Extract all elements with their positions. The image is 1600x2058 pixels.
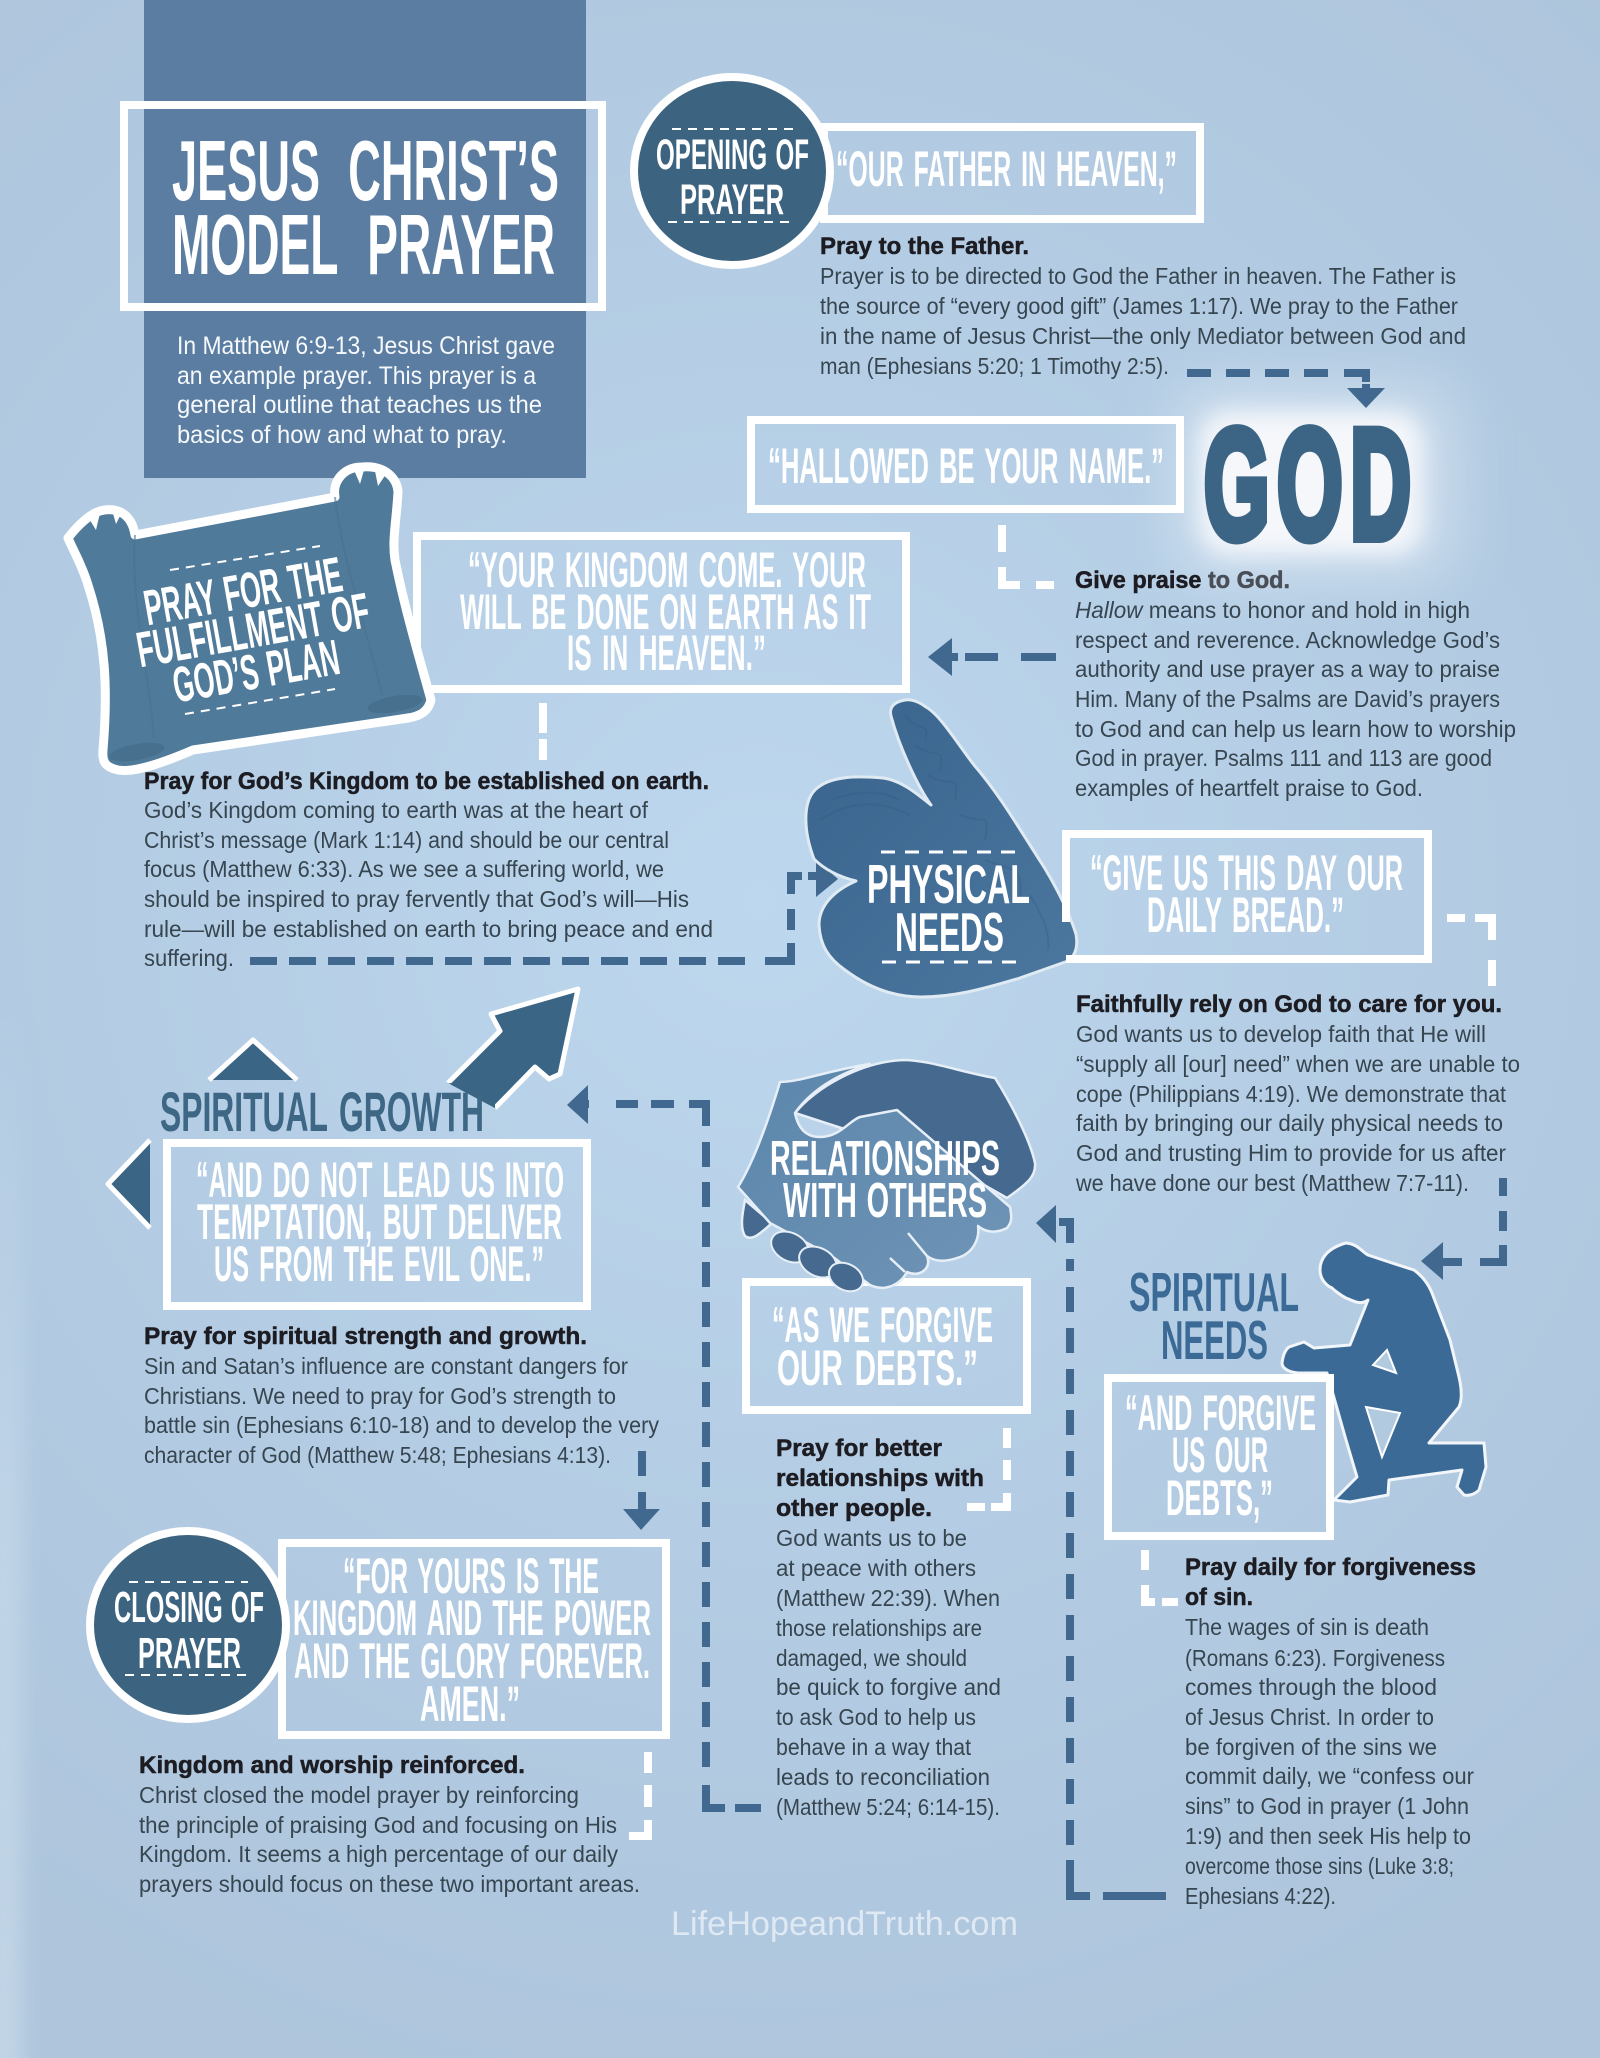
arrow: physical to spiritual needs: [1421, 1178, 1503, 1280]
text block: pray daily: comes through the blood: [1185, 1674, 1437, 1700]
text block: spiritual strength: [144, 1323, 659, 1468]
heading: spiritual needs: NEEDS: [1161, 1309, 1268, 1371]
text block: faithfully rely: [1075, 991, 1520, 1196]
icon: kneeling man: [1282, 1243, 1486, 1502]
icon: scroll: [68, 467, 431, 770]
arrow: praise to kingdom: [928, 638, 1056, 676]
text block: better relationships: be quick to forgive and: [776, 1674, 1001, 1700]
text block: faithfully rely: we have done our best (Matthew 7:7-11).: [1075, 1170, 1469, 1196]
intro text: [177, 332, 555, 449]
text block: better relationships: those relationships are: [776, 1615, 982, 1641]
panel: temptation quote box: [167, 1143, 587, 1306]
title: [172, 124, 559, 293]
text block: spiritual strength: battle sin (Ephesians 6:10-18) and to develop the very: [144, 1412, 659, 1438]
text block: give praise: Give praise to God.: [1075, 567, 1290, 594]
panel: temptation quote box: US FROM THE EVIL ONE.”: [214, 1236, 544, 1292]
panel: forgive us quote box: [1108, 1378, 1330, 1536]
text block: faithfully rely: God wants us to develop faith that He will: [1076, 1021, 1486, 1047]
text block: better relationships: leads to reconciliation: [776, 1764, 990, 1790]
panel: opening quote box: [824, 127, 1200, 219]
panel: forgive us quote box: DEBTS,”: [1166, 1470, 1273, 1526]
connector: kingdom box to text: [539, 703, 547, 760]
text block: pray to the father: [820, 233, 1466, 379]
icon: opening of prayer circle: PRAYER: [680, 176, 784, 224]
icon: handshake: WITH OTHERS: [783, 1174, 987, 1228]
icon: handshake: [738, 1060, 1035, 1297]
intro text: In Matthew 6:9-13, Jesus Christ gave: [177, 332, 555, 360]
panel: daily bread quote box: [1066, 834, 1428, 959]
text block: kingdom and worship: Christ closed the model prayer by reinforcing: [139, 1782, 579, 1808]
text block: kingdom and worship: Kingdom. It seems a high percentage of our daily: [139, 1841, 618, 1867]
panel: debtors quote box: “AS WE FORGIVE: [772, 1297, 993, 1353]
heading: God: GOD: [1204, 397, 1419, 572]
text block: spiritual strength: character of God (Matthew 5:48; Ephesians 4:13).: [144, 1442, 611, 1468]
icon: scroll: FULFILLMENT OF: [132, 582, 374, 678]
text block: pray daily: of sin.: [1185, 1584, 1253, 1611]
text block: better relationships: [776, 1435, 1001, 1820]
connector: hallowed to praise: [1002, 525, 1054, 585]
panel: title block: [124, 0, 602, 478]
icon: closing of prayer circle: PRAYER: [138, 1629, 241, 1678]
panel: kingdom quote box: [417, 536, 906, 689]
panel: hallowed quote box: [751, 420, 1180, 509]
text block: better relationships: God wants us to be: [776, 1525, 967, 1551]
title: JESUS CHRIST’S: [172, 124, 559, 219]
text block: faithfully rely: faith by bringing our daily physical needs to: [1076, 1110, 1503, 1136]
panel: forgive us quote box: US OUR: [1172, 1427, 1268, 1483]
intro text: an example prayer. This prayer is a: [177, 362, 536, 390]
text block: spiritual strength: Sin and Satan’s influence are constant dangers for: [144, 1353, 628, 1379]
text block: kingdom: Pray for God’s Kingdom to be established on earth.: [144, 768, 709, 795]
text block: kingdom: [144, 768, 713, 971]
text block: pray daily: Pray daily for forgiveness: [1185, 1554, 1476, 1581]
text block: give praise: examples of heartfelt praise to God.: [1075, 775, 1423, 801]
title: MODEL PRAYER: [172, 198, 555, 293]
text block: give praise: authority and use prayer as a way to praise: [1075, 656, 1500, 682]
icon: opening of prayer circle: OPENING OF: [656, 131, 809, 179]
text block: kingdom and worship: the principle of praising God and focusing on His: [139, 1812, 617, 1838]
panel: closing quote box: KINGDOM AND THE POWER: [293, 1590, 651, 1646]
text block: better relationships: relationships with: [776, 1465, 984, 1492]
connector: closing box to text: [629, 1752, 648, 1836]
icon: scroll: PRAY FOR THE: [140, 546, 346, 636]
text block: better relationships: Pray for better: [776, 1435, 942, 1462]
text block: pray daily: sins” to God in prayer (1 John: [1185, 1793, 1469, 1819]
panel: kingdom quote box: IS IN HEAVEN.”: [567, 625, 766, 681]
text block: better relationships: at peace with others: [776, 1555, 976, 1581]
heading: spiritual growth: SPIRITUAL GROWTH: [160, 1080, 484, 1143]
arrow: spiritual growth to closing: [623, 1451, 660, 1530]
icon: closing of prayer circle: CLOSING OF: [114, 1583, 264, 1632]
text block: give praise: [1075, 567, 1516, 801]
icon: scroll: GOD’S PLAN: [168, 629, 344, 713]
text block: give praise: respect and reverence. Acknowledge God’s: [1075, 627, 1500, 653]
panel: kingdom quote box: “YOUR KINGDOM COME. YOUR: [468, 542, 866, 598]
text block: pray daily: commit daily, we “confess our: [1185, 1763, 1474, 1789]
panel: forgive us quote box: “AND FORGIVE: [1125, 1385, 1316, 1441]
icon: handshake: RELATIONSHIPS: [770, 1132, 1000, 1186]
connector: bread box to text: [1447, 918, 1492, 986]
text block: pray to the father: Prayer is to be directed to God the Father in heaven. The Father is: [820, 263, 1456, 289]
text block: faithfully rely: Faithfully rely on God to care for you.: [1076, 991, 1502, 1018]
arrow: kingdom to physical needs: [250, 860, 838, 961]
text block: faithfully rely: God and trusting Him to provide for us after: [1076, 1140, 1506, 1166]
text block: kingdom: God’s Kingdom coming to earth was at the heart of: [144, 797, 648, 823]
text block: kingdom: rule—will be established on earth to bring peace and end: [144, 916, 713, 942]
panel: opening quote box: “OUR FATHER IN HEAVEN,”: [836, 141, 1177, 197]
arrow: opening to God: [1187, 373, 1385, 408]
text block: spiritual strength: Christians. We need to pray for God’s strength to: [144, 1383, 616, 1409]
icon: bread: [806, 700, 1077, 997]
text block: faithfully rely: cope (Philippians 4:19). We demonstrate that: [1076, 1081, 1506, 1107]
text block: pray daily: (Romans 6:23). Forgiveness: [1185, 1645, 1445, 1671]
text block: better relationships: behave in a way that: [776, 1734, 971, 1760]
text block: give praise: to God and can help us learn how to worship: [1075, 716, 1516, 742]
connector: debtors box to text: [967, 1428, 1007, 1507]
text block: pray daily: [1185, 1554, 1476, 1909]
text block: better relationships: (Matthew 22:39). When: [776, 1585, 1000, 1611]
text block: kingdom: should be inspired to pray fervently that God’s will—His: [144, 886, 689, 912]
icon: bread: PHYSICAL: [867, 853, 1030, 915]
text block: kingdom and worship: Kingdom and worship reinforced.: [139, 1752, 525, 1779]
text block: pray daily: be forgiven of the sins we: [1185, 1734, 1437, 1760]
text block: better relationships: damaged, we should: [776, 1645, 967, 1671]
text block: kingdom: Christ’s message (Mark 1:14) and should be our central: [144, 827, 669, 853]
arrow: relationships to spiritual growth: [567, 1085, 761, 1808]
text block: pray daily: overcome those sins (Luke 3:8;: [1185, 1853, 1454, 1879]
intro text: general outline that teaches us the: [177, 391, 542, 419]
panel: debtors quote box: [746, 1282, 1027, 1410]
text block: better relationships: to ask God to help us: [776, 1704, 976, 1730]
panel: kingdom quote box: WILL BE DONE ON EARTH AS IT: [460, 584, 871, 640]
footer: website: LifeHopeandTruth.com: [671, 1905, 1018, 1943]
text block: pray to the father: Pray to the Father.: [820, 233, 1029, 260]
panel: temptation quote box: “AND DO NOT LEAD US INTO: [196, 1152, 564, 1208]
icon: closing of prayer circle: [90, 1531, 286, 1719]
panel: closing quote box: “FOR YOURS IS THE: [343, 1548, 599, 1604]
text block: pray daily: Ephesians 4:22).: [1185, 1883, 1336, 1909]
text block: kingdom and worship: [139, 1752, 640, 1897]
text block: kingdom: focus (Matthew 6:33). As we see a suffering world, we: [144, 856, 664, 882]
panel: closing quote box: [282, 1543, 666, 1735]
text block: pray to the father: the source of “every good gift” (James 1:17). We pray to the Father: [820, 293, 1458, 319]
text block: give praise: God in prayer. Psalms 111 and 113 are good: [1075, 745, 1492, 771]
heading: spiritual needs: SPIRITUAL: [1129, 1261, 1299, 1323]
arrow: spiritual needs to relationships: [1036, 1205, 1166, 1896]
text block: give praise: Hallow means to honor and hold in high: [1075, 597, 1470, 623]
panel: hallowed quote box: “HALLOWED BE YOUR NAME.”: [768, 438, 1164, 494]
text block: pray to the father: man (Ephesians 5:20; 1 Timothy 2:5).: [820, 353, 1169, 379]
text block: faithfully rely: “supply all [our] need” when we are unable to: [1076, 1051, 1520, 1077]
text block: better relationships: (Matthew 5:24; 6:14-15).: [776, 1794, 1000, 1820]
icon: growth arrows: [108, 989, 578, 1228]
connector: debts box to text: [1145, 1550, 1178, 1602]
text block: pray to the father: in the name of Jesus Christ—the only Mediator between God and: [820, 323, 1466, 349]
panel: closing quote box: AND THE GLORY FOREVER.: [294, 1633, 650, 1689]
panel: closing quote box: AMEN.”: [420, 1676, 520, 1732]
panel: debtors quote box: OUR DEBTS.”: [777, 1340, 978, 1396]
text block: better relationships: other people.: [776, 1495, 932, 1522]
heading: spiritual needs: [1129, 1261, 1299, 1371]
text block: pray daily: of Jesus Christ. In order to: [1185, 1704, 1434, 1730]
text block: kingdom: suffering.: [144, 945, 234, 971]
intro text: basics of how and what to pray.: [177, 421, 507, 449]
icon: opening of prayer circle: [634, 77, 830, 265]
panel: daily bread quote box: DAILY BREAD.”: [1147, 887, 1344, 943]
glow behind God: [1175, 385, 1455, 580]
text block: pray daily: The wages of sin is death: [1185, 1614, 1429, 1640]
text block: kingdom and worship: prayers should focus on these two important areas.: [139, 1871, 640, 1897]
text block: give praise: Him. Many of the Psalms are David’s prayers: [1075, 686, 1500, 712]
panel: temptation quote box: TEMPTATION, BUT DELIVER: [197, 1194, 562, 1250]
text block: pray daily: 1:9) and then seek His help to: [1185, 1823, 1471, 1849]
text block: spiritual strength: Pray for spiritual strength and growth.: [144, 1323, 587, 1350]
icon: bread: NEEDS: [895, 901, 1004, 963]
